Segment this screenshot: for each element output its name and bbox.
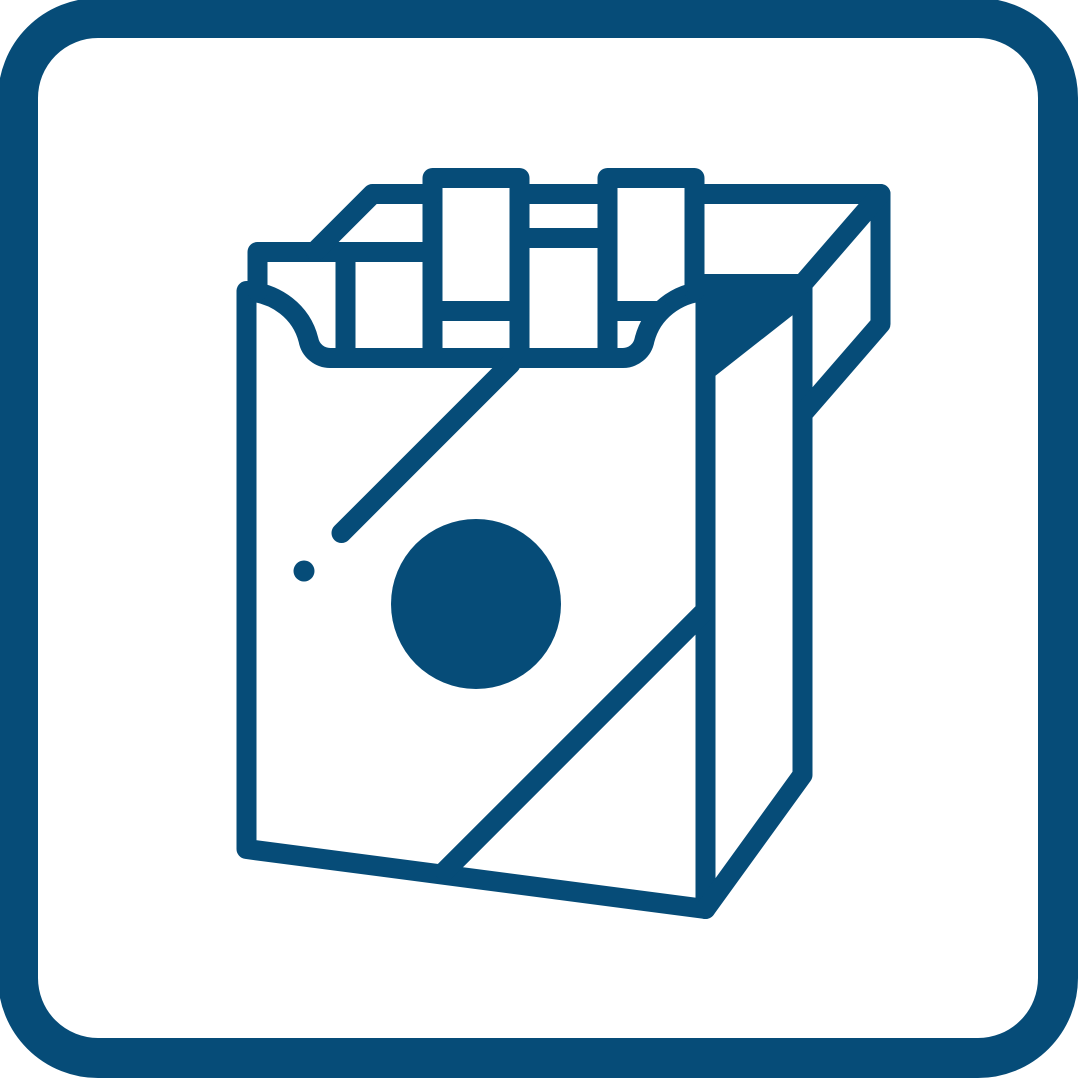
front diagonal stripe: [445, 610, 706, 871]
middle cigarette bands: [520, 194, 608, 238]
icon: small dot: [294, 560, 314, 582]
slanted back edge: [316, 194, 432, 251]
first tall cigarette band: [432, 301, 520, 321]
pack lid opening: [694, 194, 880, 284]
pack front face: [246, 291, 706, 909]
first tall cigarette: [432, 178, 520, 358]
second tall cigarette: [608, 178, 694, 358]
front diagonal highlight: [342, 364, 510, 533]
left cigarette divider: [336, 252, 356, 358]
icon: large filled circle: [391, 519, 561, 689]
pack side face: [706, 284, 802, 909]
pack back lid: [694, 194, 880, 414]
icon: cigarette pack: [246, 178, 880, 909]
left cigarette row outline: [258, 252, 432, 291]
second tall cigarette band: [608, 301, 660, 321]
icon: shaded inner flap: [705, 284, 803, 384]
